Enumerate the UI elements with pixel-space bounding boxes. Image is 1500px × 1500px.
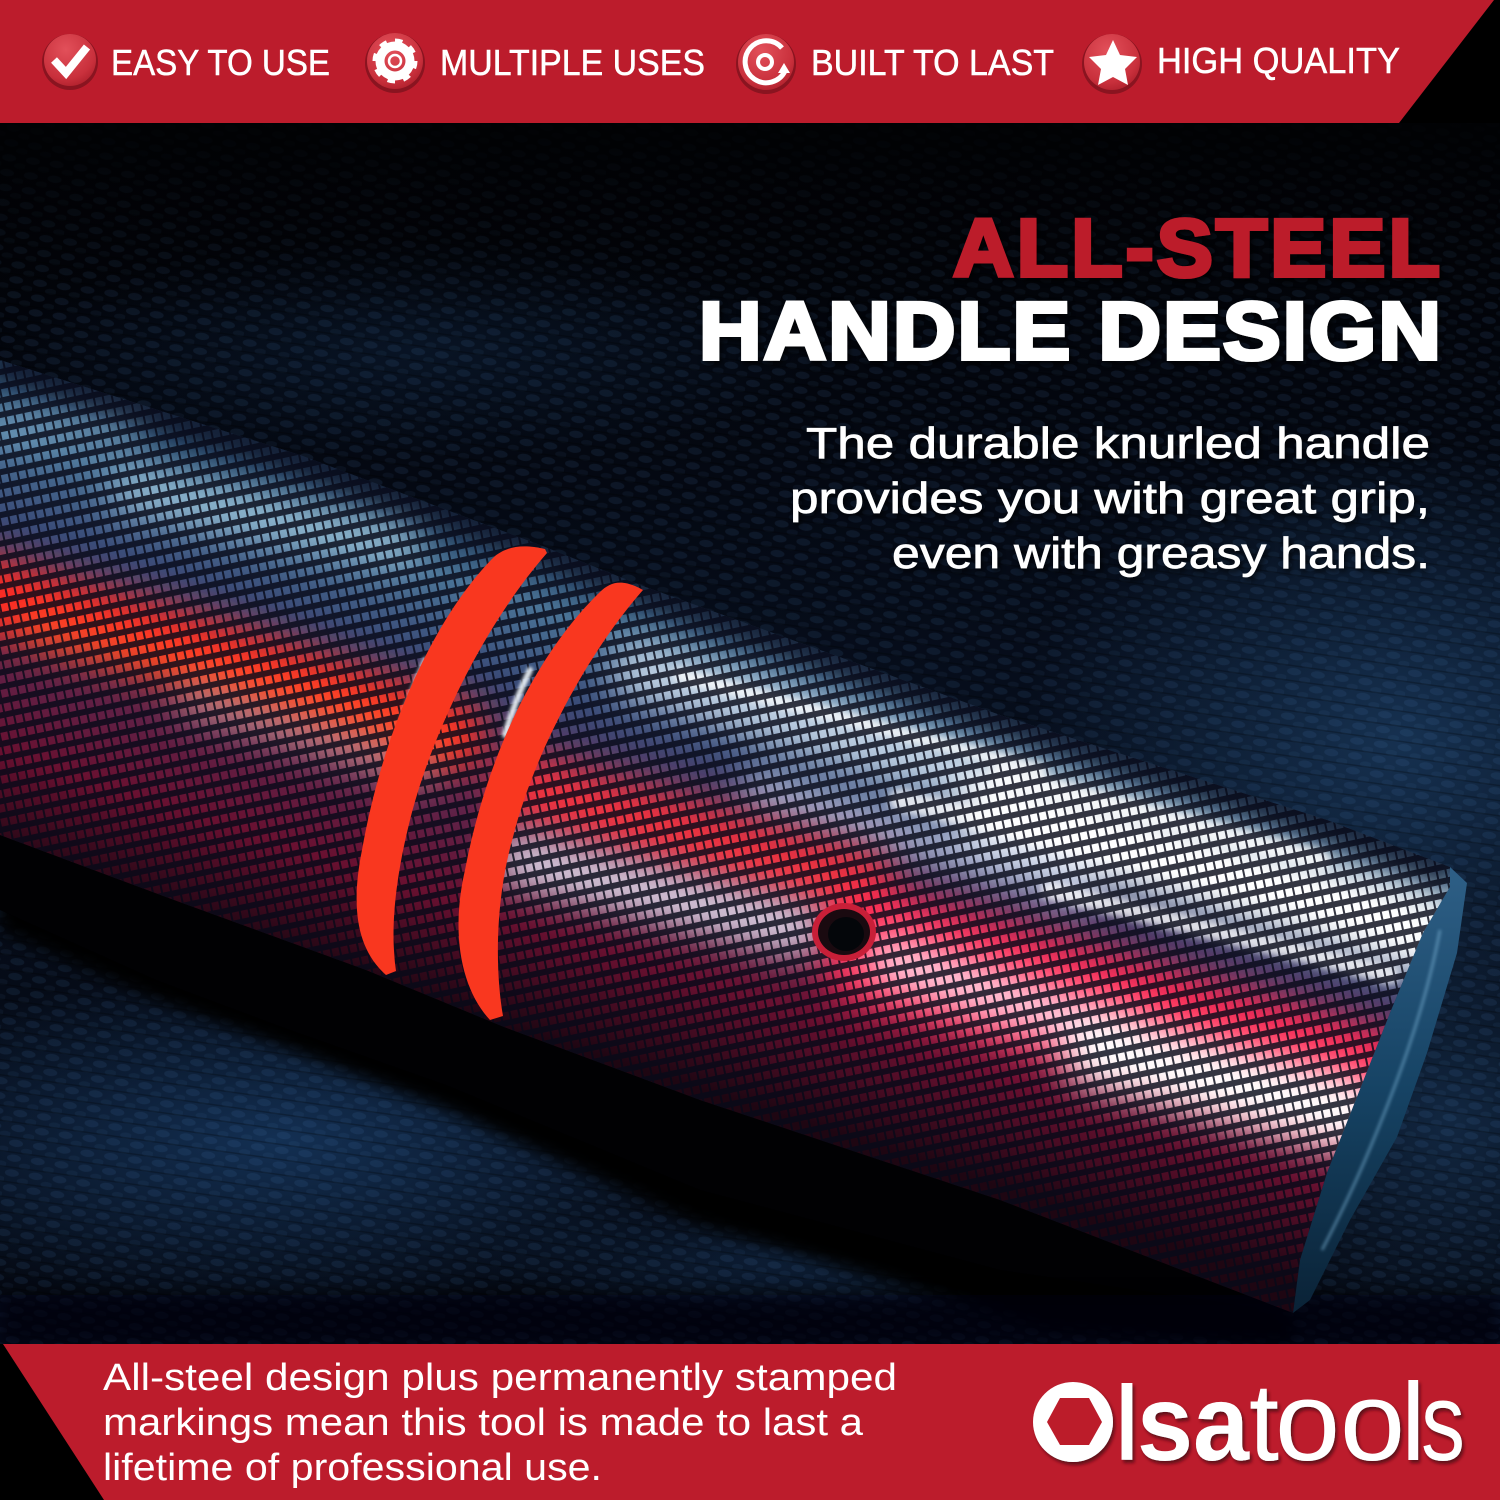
icon: gear <box>365 33 425 93</box>
staircase of light bands <box>680 675 1400 975</box>
logo: Olsatools: t <box>1249 1361 1279 1484</box>
label: easy to use: EASY TO USE <box>111 42 330 83</box>
body text: provides you with great grip, <box>790 474 1430 523</box>
body text: even with greasy hands. <box>892 529 1430 578</box>
bottom banner red shape <box>3 1344 1500 1500</box>
logo: Olsatools: O <box>1040 1378 1106 1467</box>
banner background <box>0 0 1500 123</box>
logo: Olsatools: oo <box>1275 1359 1405 1484</box>
logo: Olsatools: l <box>1401 1361 1425 1484</box>
footer text <box>103 1357 897 1489</box>
ring edge highlights <box>402 660 530 735</box>
top banner <box>0 0 1500 123</box>
heading line: handle design: HANDLE DESIGN <box>699 286 1443 377</box>
logo: Olsatools: l <box>1116 1365 1138 1483</box>
central red glow band <box>0 590 1370 1090</box>
label: high quality: HIGH QUALITY <box>1157 40 1400 81</box>
logo: Olsatools: sa <box>1137 1362 1250 1483</box>
body text: The durable knurled handle <box>806 419 1430 468</box>
banner red shape <box>0 0 1494 123</box>
footer text: lifetime of professional use. <box>103 1447 602 1489</box>
red ring one <box>357 546 547 975</box>
icon: check mark <box>42 34 98 90</box>
logo: Olsatools: s <box>1421 1361 1465 1484</box>
heading line: all-steel: ALL-STEEL <box>953 203 1443 294</box>
heading <box>699 203 1443 377</box>
red ring two <box>458 583 643 1020</box>
label: multiple uses: MULTIPLE USES <box>440 42 705 83</box>
label: built to last: BUILT TO LAST <box>811 42 1054 83</box>
white hot highlights <box>190 700 1350 1115</box>
body text <box>790 419 1430 578</box>
footer text: All-steel design plus permanently stamped <box>103 1357 897 1399</box>
knurled steel handle <box>0 360 1467 1313</box>
bottom banner <box>3 1344 1500 1500</box>
top edge shading <box>0 360 1450 867</box>
upper cool highlights <box>0 425 1430 935</box>
end cap edge <box>1293 867 1467 1313</box>
drilled hole <box>812 903 876 961</box>
icon: cycle gear <box>736 34 796 94</box>
footer text: markings mean this tool is made to last a <box>103 1402 864 1444</box>
logo: Olsatools <box>1033 1359 1465 1484</box>
icon: star <box>1082 34 1142 94</box>
